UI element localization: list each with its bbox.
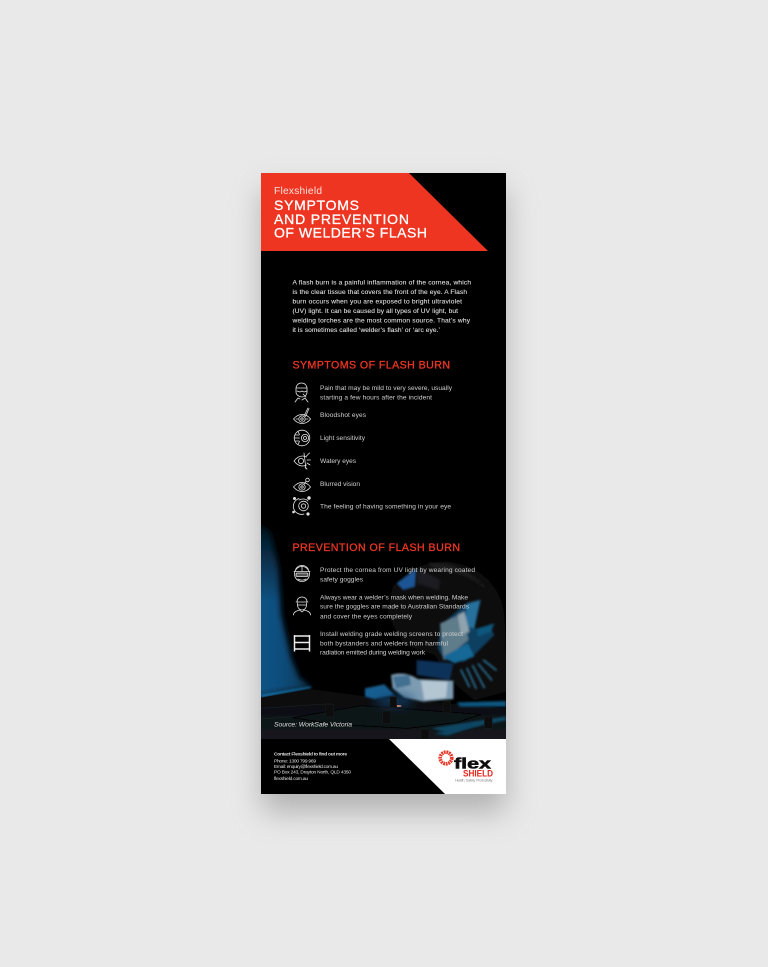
footer — [261, 739, 506, 794]
flexshield logo — [440, 752, 493, 782]
symptom: blurred vision: Blurred vision — [320, 481, 360, 488]
title: OF WELDER’S FLASH — [274, 224, 427, 240]
heading: symptoms: SYMPTOMS OF FLASH BURN — [292, 360, 450, 372]
welding photo background — [251, 515, 506, 739]
brand name: Flexshield — [274, 186, 322, 197]
prevention: welder's mask: and cover the eyes completely — [320, 613, 413, 620]
contact details: Email: enquiry@flexshield.com.au — [274, 764, 338, 770]
prevention: welding screens: both bystanders and welders from harmful — [320, 640, 449, 647]
intro text block: welding torches are the most common source. That’s why — [292, 318, 471, 324]
glove — [365, 674, 453, 702]
prevention: goggles: Protect the cornea from UV light by wearing coated — [320, 567, 475, 574]
heading: prevention: PREVENTION OF FLASH BURN — [292, 542, 460, 554]
logo tagline: Health. Safety. Productivity. — [455, 778, 493, 782]
title: AND PREVENTION — [274, 211, 409, 227]
prevention: goggles: safety goggles — [320, 577, 364, 584]
icon: light sensitivity — [294, 430, 310, 446]
logo wordmark shield: SHIELD — [463, 768, 493, 778]
title — [274, 197, 427, 240]
symptom: bloodshot eyes: Bloodshot eyes — [320, 412, 367, 419]
icon: head in pain — [295, 383, 308, 402]
symptom: foreign body feeling: The feeling of having something in your eye — [320, 504, 451, 510]
title: SYMPTOMS — [274, 197, 359, 213]
logo wordmark flex: flex — [454, 756, 492, 772]
symptoms list — [293, 383, 453, 515]
source note: Source: WorkSafe Victoria — [274, 722, 352, 729]
symptom: pain: Pain that may be mild to very severe, usually — [320, 385, 453, 392]
header banner — [261, 173, 488, 251]
icon: blurred vision — [294, 478, 310, 492]
prevention: welding screens — [320, 631, 463, 657]
logo mark — [440, 752, 452, 764]
panel drop shadow — [262, 190, 506, 812]
contact details: Phone: 1300 799 969 — [274, 758, 316, 764]
table plate — [293, 706, 481, 728]
wall — [261, 524, 313, 698]
icon: welder with mask — [294, 597, 310, 615]
arc glow — [374, 693, 414, 707]
symptom: pain — [320, 385, 453, 402]
sleeve — [438, 600, 494, 663]
symptom: light sensitivity: Light sensitivity — [320, 435, 366, 442]
contact details: Contact Flexshield to find out more — [274, 751, 347, 757]
icon: hard hat and goggles — [294, 566, 310, 582]
icon: bloodshot eye — [294, 408, 310, 424]
intro text block: (UV) light. It can be caused by all types of UV light, but — [292, 308, 458, 315]
icon: watery eye — [294, 453, 310, 469]
sleeve stripes — [461, 660, 496, 688]
welder helmet and body — [388, 561, 506, 700]
prevention: welding screens: radiation emitted during welding work — [320, 650, 426, 657]
intro text block: A flash burn is a painful inflammation of the cornea, which — [292, 279, 471, 286]
forearm — [417, 660, 453, 680]
contact details: flexshield.com.au — [274, 776, 308, 782]
symptom: pain: starting a few hours after the incident — [320, 394, 432, 402]
intro text block: it is sometimes called ‘welder’s flash’ or ‘arc eye.’ — [292, 327, 441, 334]
intro text block: is the clear tissue that covers the front of the eye. A Flash — [292, 289, 467, 296]
symptom: watery eyes: Watery eyes — [320, 458, 357, 465]
contact details: PO Box 243, Drayton North, QLD 4350 — [274, 769, 351, 775]
prevention: welder's mask: sure the goggles are made to Australian Standards — [320, 604, 470, 611]
floor — [261, 689, 506, 739]
prevention: welder's mask: Always wear a welder’s mask when welding. Make — [320, 594, 468, 601]
white logo wedge — [389, 739, 506, 794]
prevention list — [294, 566, 475, 657]
contact details — [274, 751, 351, 782]
icon: welding screen — [294, 635, 310, 652]
prevention: welding screens: Install welding grade welding screens to protect — [320, 631, 463, 638]
intro text block: burn occurs when you are exposed to bright ultraviolet — [292, 298, 462, 306]
infographic panel — [251, 173, 506, 794]
clamps — [326, 697, 492, 739]
icon: foreign body in eye — [293, 497, 310, 515]
intro text block — [292, 279, 471, 334]
prevention: goggles — [320, 567, 475, 584]
prevention: welder's mask — [320, 594, 470, 620]
